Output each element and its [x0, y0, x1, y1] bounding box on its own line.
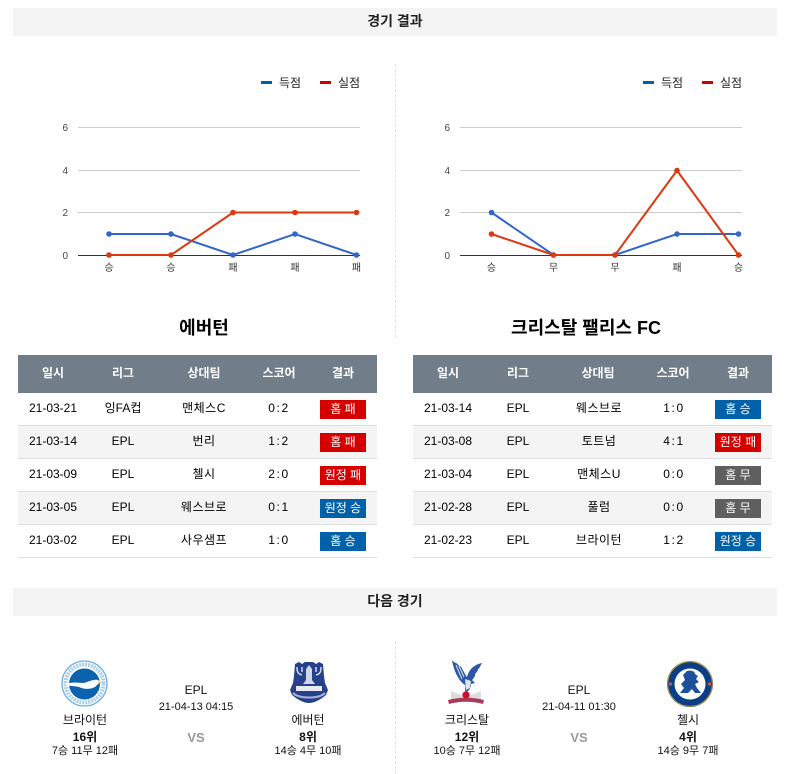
versus mark: VS — [187, 730, 205, 745]
table: Crystal Palace recent matches: 1:2 — [663, 533, 685, 547]
table: Crystal Palace recent matches: 홈 무 — [725, 468, 751, 482]
table: Crystal Palace recent matches: 원정 패 — [720, 435, 756, 449]
table: Everton recent matches: 웨스브로 — [181, 500, 227, 514]
table: Everton recent matches: 0:2 — [268, 401, 290, 415]
chart: Crystal Palace goals: 6 — [444, 123, 450, 134]
table: Everton recent matches: 홈 패 — [330, 435, 356, 449]
away team: Chelsea: 첼시 — [677, 713, 699, 727]
chart: Crystal Palace goals: 무 — [549, 263, 558, 274]
match info: Brighton vs Everton — [52, 683, 342, 757]
chart: Crystal Palace goals: 4 — [444, 166, 450, 177]
table: Crystal Palace recent matches: 4:1 — [663, 434, 685, 448]
chart: Crystal Palace goals: 무 — [610, 263, 620, 274]
chart: Everton goals: 4 — [62, 166, 68, 177]
home team: Crystal Palace: 크리스탈 — [445, 713, 489, 727]
table: Everton recent matches: 첼시 — [192, 467, 216, 481]
table: Crystal Palace recent matches: 맨체스U — [577, 467, 621, 481]
heading: match results: 경기 결과 — [367, 13, 423, 29]
table: Crystal Palace recent matches: 1:0 — [663, 401, 685, 415]
table: Crystal Palace recent matches: 상대팀 — [581, 366, 615, 380]
table: Crystal Palace recent matches — [413, 355, 772, 558]
table: Everton recent matches: 홈 패 — [330, 402, 356, 416]
match time: 21-04-11 01:30 — [542, 701, 616, 713]
away record: Everton: 14승 4무 10패 — [274, 745, 342, 757]
away team: Everton: 에버턴 — [291, 713, 325, 727]
chart: Everton goals: 패 — [352, 262, 361, 274]
home record: Brighton — [52, 730, 118, 757]
chart: Everton goals: 승 — [104, 262, 114, 274]
table: Crystal Palace recent matches: 웨스브로 — [576, 401, 622, 415]
table: Crystal Palace recent matches: EPL — [507, 467, 529, 481]
heading: next match — [13, 588, 777, 616]
table: Everton recent matches: 사우샘프 — [181, 533, 227, 547]
chart: Crystal Palace goals: 패 — [672, 262, 682, 274]
heading: next match: 다음 경기 — [367, 593, 423, 609]
away record: Everton — [274, 730, 342, 757]
team name: Crystal Palace FC: 크리스탈 팰리스 FC — [511, 318, 661, 338]
table: Everton recent matches: EPL — [112, 434, 134, 448]
table: Everton recent matches: 번리 — [192, 434, 216, 448]
chart: Everton goals: 2 — [62, 208, 68, 219]
chart: Crystal Palace goals: 2 — [444, 208, 450, 219]
match time — [542, 683, 616, 713]
table: Everton recent matches: 21-03-05 — [29, 500, 77, 514]
icon: Brighton crest — [61, 660, 108, 707]
table: Everton recent matches: 21-03-21 — [29, 401, 77, 415]
chart: Crystal Palace goals: 승 — [487, 262, 496, 274]
chart: Crystal Palace goals: 승 — [734, 262, 743, 274]
table: Crystal Palace recent matches: 결과 — [727, 366, 749, 380]
table: Everton recent matches: EPL — [112, 500, 134, 514]
chart: Everton goals — [62, 76, 361, 274]
away record: Everton: 8위 — [299, 730, 317, 744]
chart: Crystal Palace goals: 실점 — [720, 76, 742, 90]
table: Everton recent matches: 원정 승 — [325, 501, 361, 515]
home record: Crystal Palace: 12위 — [455, 730, 479, 744]
home record: Brighton: 7승 11무 12패 — [52, 745, 118, 757]
table: Everton recent matches: 상대팀 — [187, 366, 221, 380]
table: Everton recent matches: 원정 패 — [325, 468, 361, 482]
table: Crystal Palace recent matches: EPL — [507, 500, 529, 514]
table: Crystal Palace recent matches: EPL — [507, 434, 529, 448]
icon: Crystal Palace crest — [448, 660, 484, 704]
table: Everton recent matches: 홈 승 — [330, 534, 356, 548]
chart: Crystal Palace goals: 득점 — [661, 76, 683, 90]
table: Crystal Palace recent matches: 21-03-14 — [424, 401, 472, 415]
table: Crystal Palace recent matches: 스코어 — [656, 366, 690, 380]
table: Everton recent matches: 1:0 — [268, 533, 290, 547]
table: Everton recent matches: 결과 — [332, 366, 354, 380]
away record: Chelsea: 14승 9무 7패 — [658, 745, 718, 757]
home record: Crystal Palace: 10승 7무 12패 — [433, 745, 501, 757]
table: Crystal Palace recent matches: 0:0 — [663, 467, 685, 481]
chart: Crystal Palace goals — [444, 76, 743, 274]
table: Crystal Palace recent matches: 21-02-23 — [424, 533, 472, 547]
table: Everton recent matches: 1:2 — [268, 434, 290, 448]
versus mark: VS — [570, 730, 588, 745]
icon: Everton crest — [290, 662, 328, 703]
table: Everton recent matches: EPL — [112, 533, 134, 547]
chart: Everton goals: 실점 — [338, 76, 360, 90]
table: Crystal Palace recent matches: 리그 — [507, 366, 529, 380]
table: Crystal Palace recent matches: 토트넘 — [582, 434, 616, 448]
chart: Everton goals: 패 — [290, 262, 300, 274]
table: Everton recent matches: 리그 — [112, 366, 134, 380]
table: Everton recent matches: 21-03-02 — [29, 533, 77, 547]
table: Everton recent matches: 2:0 — [268, 467, 290, 481]
match time: EPL — [185, 683, 207, 697]
chart: Everton goals: 승 — [166, 262, 176, 274]
home record: Crystal Palace — [433, 730, 501, 757]
table: Everton recent matches — [18, 355, 377, 558]
table: Crystal Palace recent matches: 풀럼 — [587, 500, 611, 514]
home record: Brighton: 16위 — [73, 730, 97, 744]
heading: match results — [13, 8, 777, 36]
table: Crystal Palace recent matches: EPL — [507, 401, 529, 415]
table: Everton recent matches: 일시 — [42, 366, 64, 380]
chart: Everton goals: 패 — [228, 262, 238, 274]
table: Crystal Palace recent matches: 일시 — [437, 366, 459, 380]
icon: Chelsea crest — [667, 661, 713, 707]
match time — [159, 683, 233, 713]
table: Everton recent matches: EPL — [112, 467, 134, 481]
match time: EPL — [568, 683, 590, 697]
table: Crystal Palace recent matches: EPL — [507, 533, 529, 547]
away record: Chelsea: 4위 — [679, 730, 697, 744]
table: Everton recent matches: 21-03-14 — [29, 434, 77, 448]
table: Crystal Palace recent matches: 브라이턴 — [576, 533, 622, 547]
table: Crystal Palace recent matches: 21-03-08 — [424, 434, 472, 448]
table: Everton recent matches: 21-03-09 — [29, 467, 77, 481]
table: Crystal Palace recent matches: 홈 승 — [725, 402, 751, 416]
table: Everton recent matches: 잉FA컵 — [105, 401, 141, 415]
home team: Brighton: 브라이턴 — [63, 713, 107, 727]
chart: Crystal Palace goals: 0 — [444, 251, 450, 262]
table: Everton recent matches: 스코어 — [262, 366, 296, 380]
table: Crystal Palace recent matches: 21-02-28 — [424, 500, 472, 514]
chart: Everton goals: 득점 — [279, 76, 301, 90]
team name: Everton: 에버턴 — [179, 318, 229, 338]
chart: Everton goals: 0 — [62, 251, 68, 262]
table: Everton recent matches: 0:1 — [268, 500, 290, 514]
match time: 21-04-13 04:15 — [159, 701, 233, 713]
away record: Chelsea — [658, 730, 718, 757]
table: Everton recent matches: 맨체스C — [182, 401, 226, 415]
table: Crystal Palace recent matches: 원정 승 — [720, 534, 756, 548]
table: Crystal Palace recent matches: 0:0 — [663, 500, 685, 514]
match info: Crystal Palace vs Chelsea — [433, 683, 718, 757]
table: Crystal Palace recent matches: 홈 무 — [725, 501, 751, 515]
table: Crystal Palace recent matches: 21-03-04 — [424, 467, 472, 481]
chart: Everton goals: 6 — [62, 123, 68, 134]
